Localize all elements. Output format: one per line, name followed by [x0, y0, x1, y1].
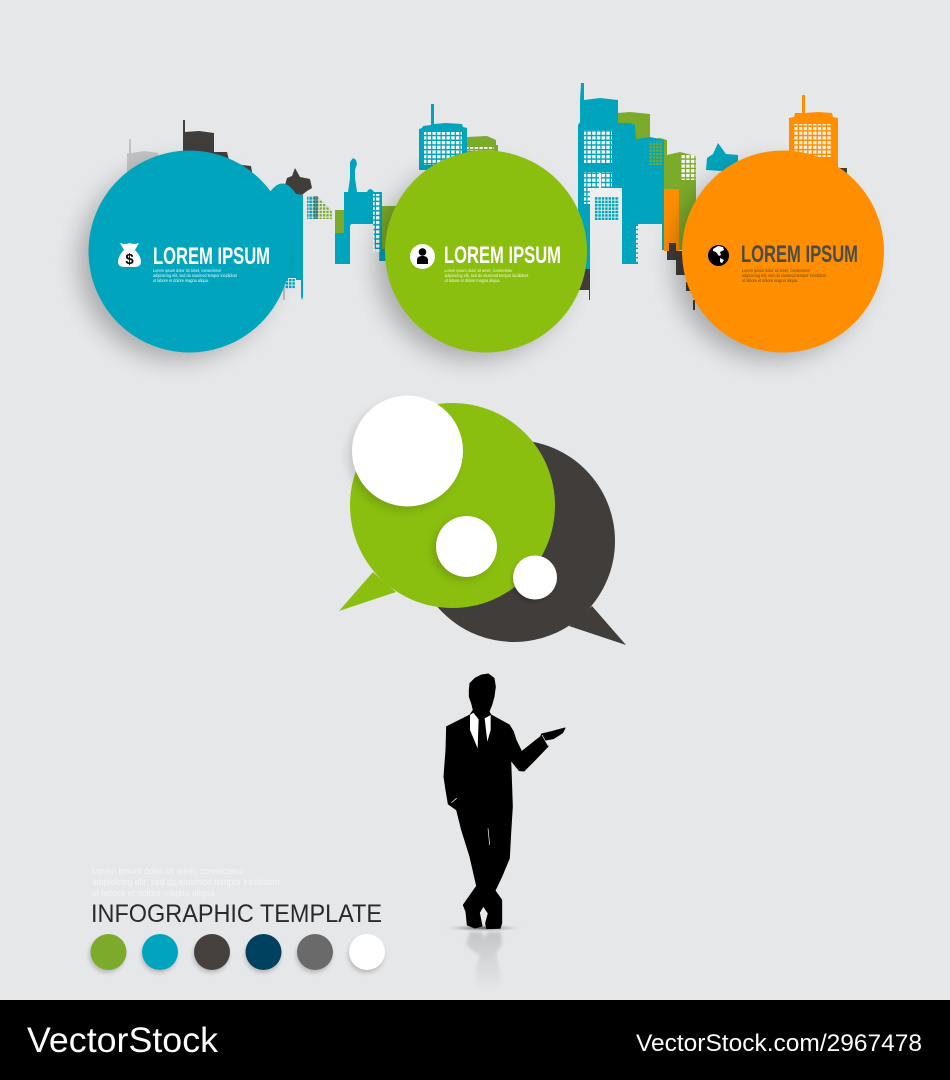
dark speech bubble [413, 440, 626, 645]
body text: Lorem ipsum dolor sit amet, consectetur [444, 268, 513, 273]
circle [385, 150, 587, 352]
building: dark tower left [183, 120, 252, 172]
body text: adipisicing elit, sed do eiusmod tempor incididunt [444, 273, 529, 278]
pale building with teal windows [590, 173, 622, 300]
dark stepped block [667, 243, 690, 275]
medium white circle [434, 516, 497, 579]
heading: LOREM IPSUM [444, 242, 561, 269]
building: gray tower left [127, 139, 158, 185]
orange block [664, 189, 679, 251]
building: dark roof [285, 168, 312, 195]
businessman silhouette [444, 674, 565, 929]
body text: ut labore et dolore magna aliqua. [742, 278, 798, 283]
teal building mid [335, 189, 385, 264]
panel: orange circle [673, 150, 884, 360]
circle [682, 150, 884, 352]
small white circle [512, 556, 557, 601]
white shirt [470, 713, 491, 748]
caption text: adipisicing elit, sed do eiusmod tempor incididunt [92, 877, 280, 888]
dotted building [307, 196, 332, 219]
title: INFOGRAPHIC TEMPLATE [91, 900, 382, 928]
body text: Lorem ipsum dolor sit amet, consectetur [153, 268, 221, 273]
body text: adipisicing elit, sed do eiusmod tempor incididunt [153, 273, 238, 278]
large white circle [349, 396, 463, 510]
circle [88, 150, 290, 352]
dark fragment right [835, 168, 847, 175]
circle shadow [79, 164, 275, 360]
body text: Lorem ipsum dolor sit amet, consectetur [742, 268, 810, 273]
footer band [0, 1000, 950, 1080]
small pale building [283, 278, 301, 300]
green block [335, 210, 345, 234]
footer image id: VectorStock.com/2967478 [636, 1030, 922, 1057]
reflection of businessman [466, 932, 502, 990]
caption text [92, 866, 280, 899]
orange tower [789, 95, 838, 170]
body text: ut labore et dolore magna aliqua. [444, 278, 500, 283]
icon: person badge [410, 244, 435, 269]
teal skyline [578, 83, 664, 269]
body text: ut labore et dolore magna aliqua. [153, 278, 209, 283]
body text [444, 268, 529, 283]
heading: LOREM IPSUM [153, 243, 270, 270]
green building behind second circle [379, 206, 401, 261]
circle shadow [673, 164, 869, 360]
body text [742, 268, 827, 283]
green skyline [618, 112, 696, 250]
speech bubbles [339, 396, 626, 645]
teal roof building [706, 143, 738, 171]
footer brand: VectorStock [27, 1021, 219, 1060]
circle shadow [376, 164, 572, 360]
icon: money bag [118, 243, 141, 268]
body text: adipisicing elit, sed do eiusmod tempor incididunt [742, 273, 827, 278]
city skyline [127, 83, 847, 310]
building: teal tower by first circle [270, 183, 303, 300]
green speech bubble [339, 403, 555, 611]
body text [153, 268, 238, 283]
dark base under second circle [575, 269, 590, 300]
suit details [451, 735, 548, 845]
teal building with windows [419, 104, 467, 170]
panel: teal circle [79, 150, 290, 360]
colour swatches [90, 934, 385, 972]
green building windows [681, 155, 696, 180]
icon: money bag: $ [125, 251, 134, 268]
caption text: Lorem ipsum dolor sit amet, consectetur [92, 866, 244, 877]
floor shadow [441, 924, 525, 932]
icon: globe [708, 245, 729, 266]
caption text: ut labore et dolore magna aliqua. [92, 888, 217, 899]
heading: LOREM IPSUM [741, 241, 858, 268]
crane tower [348, 158, 357, 192]
green low building [467, 136, 498, 157]
panel: green circle [376, 150, 587, 360]
